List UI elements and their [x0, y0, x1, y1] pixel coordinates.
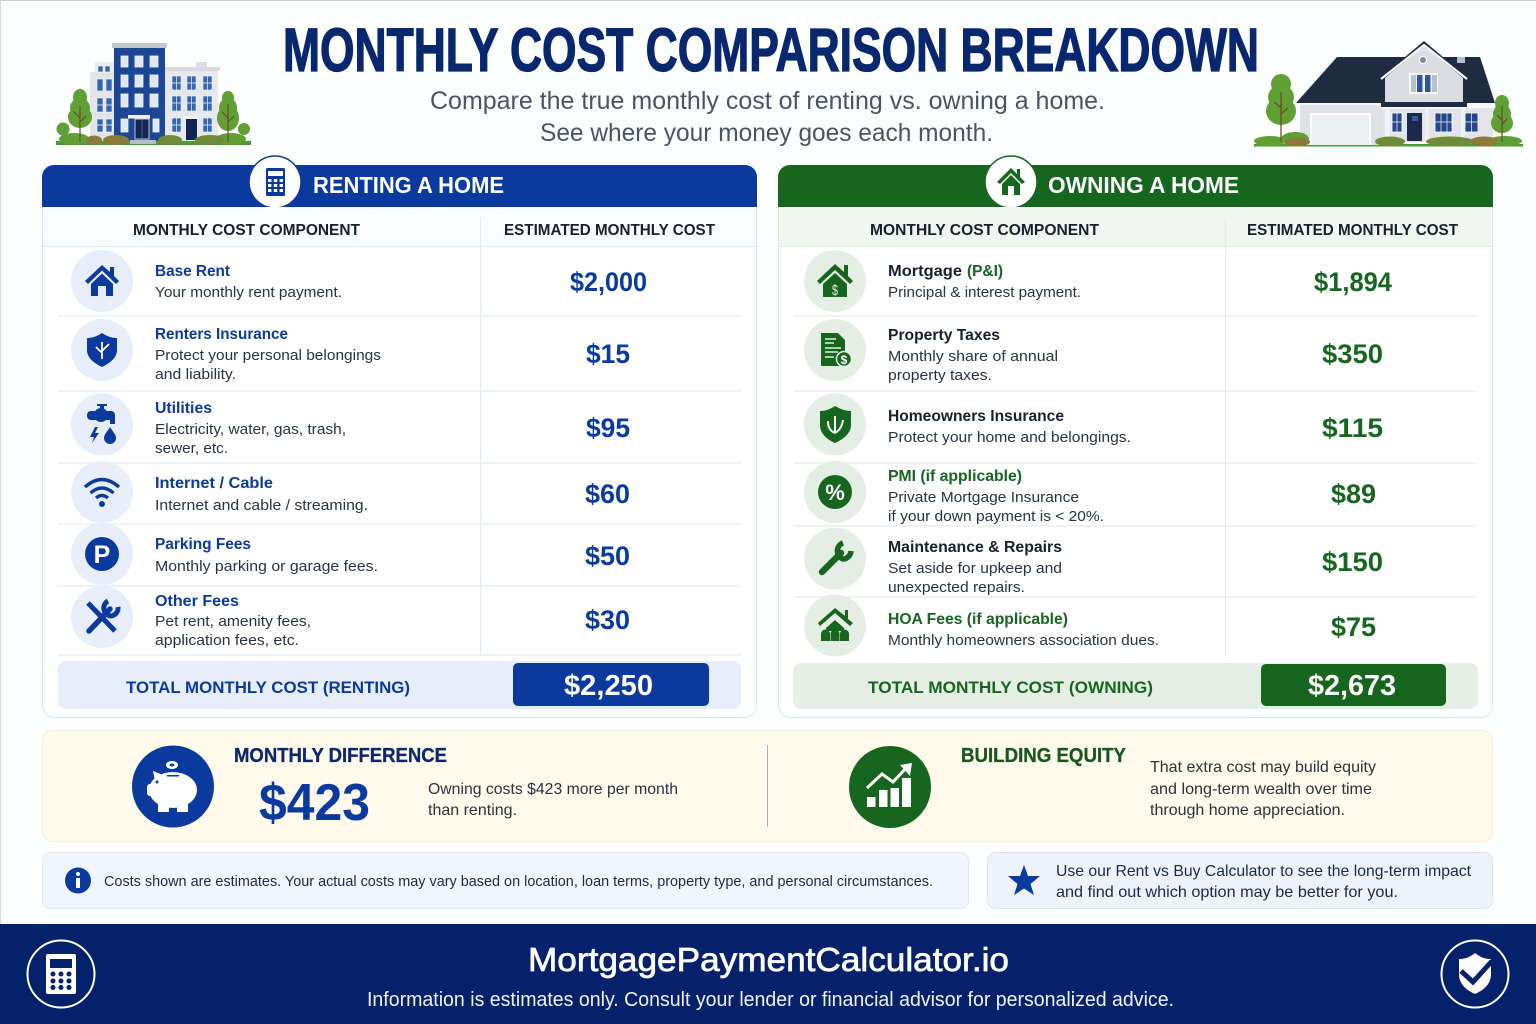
row: pmi: Private Mortgage Insurance: [888, 489, 1079, 506]
icon: growth chart: [849, 746, 931, 828]
row: renters insurance: $15: [586, 339, 630, 369]
row: maintenance and repairs: unexpected repairs.: [888, 579, 1025, 596]
total: owning: $2,673: [1308, 670, 1396, 702]
note: rent vs buy calculator: Use our Rent vs Buy Calculator to see the long-term impact: [1056, 863, 1472, 880]
illustration: apartment buildings: [56, 43, 251, 145]
footer disclaimer: Information is estimates only. Consult your lender or financial advisor for personalized advice.: [367, 989, 1174, 1011]
row: renters insurance: Protect your personal belongings: [155, 347, 381, 364]
note: estimates disclaimer: Costs shown are estimates. Your actual costs may vary based on location, loan terms, property type, and personal circumstances.: [104, 873, 933, 890]
panel: monthly difference and building equity: [42, 730, 1492, 842]
icon: tools: [88, 601, 118, 631]
note: estimates disclaimer: [42, 852, 968, 908]
subtitle: Compare the true monthly cost of renting vs. owning a home.: [430, 87, 1105, 115]
icon: tax document: $: [841, 353, 848, 367]
icon: parking: P: [94, 541, 110, 569]
building equity text: [1150, 759, 1376, 819]
row: pmi: if your down payment is < 20%.: [888, 508, 1104, 525]
row: mortgage: [804, 250, 1392, 312]
panel: renting a home: [42, 156, 757, 718]
row: other fees: Other Fees: [155, 593, 239, 610]
row: homeowners insurance: Protect your home and belongings.: [888, 429, 1131, 446]
table header: renting: [43, 207, 756, 246]
row: property taxes: $350: [1322, 339, 1383, 369]
table header: renting: MONTHLY COST COMPONENT: [133, 222, 360, 239]
monthly difference text: than renting.: [428, 802, 517, 819]
row: maintenance and repairs: $150: [1322, 547, 1383, 577]
row: maintenance and repairs: Maintenance & Repairs: [888, 539, 1062, 556]
total: renting: [58, 661, 741, 709]
monthly difference heading: MONTHLY DIFFERENCE: [234, 745, 447, 767]
footer site name: MortgagePaymentCalculator.io: [528, 941, 1009, 978]
illustration: suburban house: [1254, 41, 1523, 146]
panel header: renting: RENTING A HOME: [313, 172, 504, 198]
icon: star: [1008, 865, 1040, 895]
monthly difference text: [428, 781, 678, 819]
table header: owning: MONTHLY COST COMPONENT: [870, 222, 1099, 239]
row: homeowners insurance: $115: [1322, 413, 1383, 443]
monthly difference text: Owning costs $423 more per month: [428, 781, 678, 798]
icon: shield: [87, 333, 117, 367]
row: hoa fees: Monthly homeowners association dues.: [888, 632, 1159, 649]
row: mortgage: $1,894: [1314, 267, 1392, 297]
row: internet / cable: Internet and cable / streaming.: [155, 497, 368, 514]
row: mortgage: Mortgage: [888, 263, 962, 280]
icon: house with dollar: [817, 264, 853, 299]
row: other fees: $30: [585, 605, 630, 635]
panel header: renting: [42, 156, 757, 208]
row: utilities: Electricity, water, gas, trash,: [155, 421, 346, 438]
row: other fees: Pet rent, amenity fees,: [155, 613, 311, 630]
icon: footer calculator: [28, 940, 94, 1008]
total: renting: $2,250: [564, 670, 653, 702]
total: owning: [793, 663, 1478, 709]
row: internet / cable: [71, 461, 630, 523]
row: utilities: sewer, etc.: [155, 440, 228, 457]
table header: owning: ESTIMATED MONTHLY COST: [1247, 222, 1458, 239]
building equity heading: BUILDING EQUITY: [961, 745, 1127, 767]
icon: house with dollar: $: [832, 282, 838, 299]
row: property taxes: [804, 319, 1383, 384]
row: mortgage: Principal & interest payment.: [888, 284, 1081, 301]
total: owning: TOTAL MONTHLY COST (OWNING): [868, 678, 1153, 697]
row: homeowners insurance: Homeowners Insurance: [888, 408, 1064, 425]
monthly difference value: $423: [259, 774, 370, 832]
icon: piggy bank: [132, 746, 214, 828]
icon: footer shield: [1442, 940, 1508, 1008]
row: parking fees: [71, 523, 630, 585]
building equity text: That extra cost may build equity: [1150, 759, 1376, 776]
icon: neighborhood houses: [818, 608, 853, 641]
row: pmi: PMI (if applicable): [888, 468, 1022, 485]
panel: owning a home: [778, 156, 1493, 718]
subtitle: [430, 87, 1105, 147]
row: property taxes: Monthly share of annual: [888, 348, 1058, 365]
icon: shield with plant: [820, 406, 851, 443]
row: parking fees: Parking Fees: [155, 536, 251, 553]
row: base rent: $2,000: [570, 267, 647, 297]
footer: [0, 924, 1536, 1024]
building equity text: and long-term wealth over time: [1150, 781, 1372, 798]
row: mortgage: (P&I): [967, 263, 1003, 280]
row: parking fees: Monthly parking or garage fees.: [155, 558, 378, 575]
row: renters insurance: Renters Insurance: [155, 326, 288, 343]
icon: tax document: [821, 333, 852, 367]
row: utilities: $95: [586, 413, 630, 443]
row: property taxes: Property Taxes: [888, 327, 1000, 344]
row: internet / cable: Internet / Cable: [155, 475, 273, 492]
panel header: owning: OWNING A HOME: [1048, 172, 1239, 198]
row: pmi: [804, 461, 1376, 525]
icon: wifi: [85, 480, 119, 506]
icon: faucet, bolt and drop: [87, 404, 116, 444]
icon: wrench: [822, 543, 851, 572]
row: property taxes: property taxes.: [888, 367, 992, 384]
building equity text: through home appreciation.: [1150, 802, 1345, 819]
icon: percent: [818, 475, 852, 509]
subtitle: See where your money goes each month.: [540, 119, 993, 147]
icon: house: [85, 265, 119, 296]
row: hoa fees: [804, 594, 1376, 656]
row: other fees: [71, 586, 630, 649]
row: parking fees: $50: [585, 541, 630, 571]
row: maintenance and repairs: Set aside for upkeep and: [888, 560, 1062, 577]
panel header: owning: [778, 156, 1493, 208]
row: base rent: Your monthly rent payment.: [155, 284, 342, 301]
row: base rent: [71, 250, 647, 312]
note: rent vs buy calculator: [988, 852, 1492, 908]
row: other fees: application fees, etc.: [155, 632, 299, 649]
row: renters insurance: [71, 319, 630, 383]
row: renters insurance: and liability.: [155, 366, 236, 383]
icon: info: [65, 868, 91, 894]
total: renting: TOTAL MONTHLY COST (RENTING): [126, 678, 410, 697]
row: internet / cable: $60: [585, 479, 630, 509]
table header: renting: ESTIMATED MONTHLY COST: [504, 222, 715, 239]
note: rent vs buy calculator: and find out which option may be better for you.: [1056, 884, 1398, 901]
row: homeowners insurance: [804, 394, 1383, 456]
row: utilities: Utilities: [155, 400, 212, 417]
table header: owning: [779, 207, 1492, 246]
row: base rent: Base Rent: [155, 263, 231, 280]
row: hoa fees: HOA Fees (if applicable): [888, 611, 1068, 628]
icon: percent: %: [825, 480, 845, 505]
icon: parking: [85, 537, 119, 571]
row: pmi: $89: [1331, 479, 1376, 509]
row: maintenance and repairs: [804, 528, 1383, 596]
row: hoa fees: $75: [1331, 612, 1376, 642]
row: utilities: [71, 394, 630, 457]
